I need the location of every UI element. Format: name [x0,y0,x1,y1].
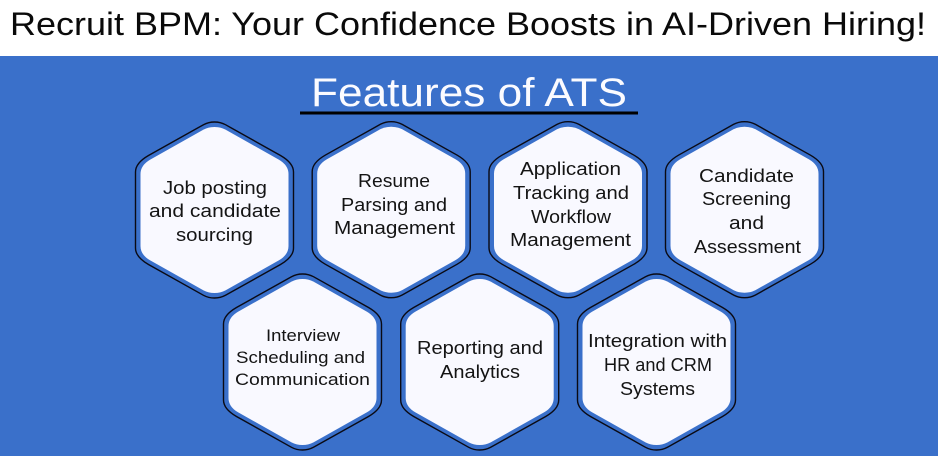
hexagon: Application Tracking and Workflow Management: Tracking and [513,183,629,203]
hexagon: Integration with HR and CRM Systems: Systems [620,379,695,399]
hexagon: Job posting and candidate sourcing: Job posting [163,178,267,198]
hexagon: Interview Scheduling and Communication [224,274,382,450]
hexagon: Application Tracking and Workflow Management: Application [520,159,621,179]
hexagon: Reporting and Analytics [401,274,559,450]
hexagon: Reporting and Analytics: Analytics [440,362,520,382]
hexagon: Candidate Screening and Assessment: Assessment [694,237,801,257]
hexagon: Integration with HR and CRM Systems: Integration with [588,331,727,351]
hexagon: Candidate Screening and Assessment: Screening [702,189,791,209]
hexagon: Integration with HR and CRM Systems [578,274,736,450]
hexagon: Application Tracking and Workflow Management: Management [510,230,631,250]
hexagon: Resume Parsing and Management: Parsing and [341,195,447,215]
title: Recruit BPM: Your Confidence Boosts in AI-Driven Hiring! [10,6,926,42]
heading: Features of ATS: Features of ATS [311,71,627,115]
hexagon: Interview Scheduling and Communication: Interview [266,327,340,345]
hexagon: Resume Parsing and Management: Resume [358,171,430,191]
hexagon: Interview Scheduling and Communication: Scheduling and [236,349,365,367]
hexagon: Resume Parsing and Management [312,122,470,298]
hexagon: Reporting and Analytics: Reporting and [417,338,543,358]
hexagon: Job posting and candidate sourcing: sourcing [176,225,253,245]
hexagon: Application Tracking and Workflow Management: Workflow [531,207,612,227]
hexagon: Interview Scheduling and Communication: Communication [235,371,370,389]
hexagon: Candidate Screening and Assessment: and [729,213,764,233]
hexagon: Job posting and candidate sourcing [136,122,294,298]
hexagon: Candidate Screening and Assessment: Candidate [699,166,794,186]
hexagon: Resume Parsing and Management: Management [334,218,455,238]
hexagon: Job posting and candidate sourcing: and candidate [149,201,281,221]
hexagon: Integration with HR and CRM Systems: HR and CRM [604,355,712,375]
hexagon: Candidate Screening and Assessment [666,122,824,298]
hexagon: Application Tracking and Workflow Management [489,122,647,298]
